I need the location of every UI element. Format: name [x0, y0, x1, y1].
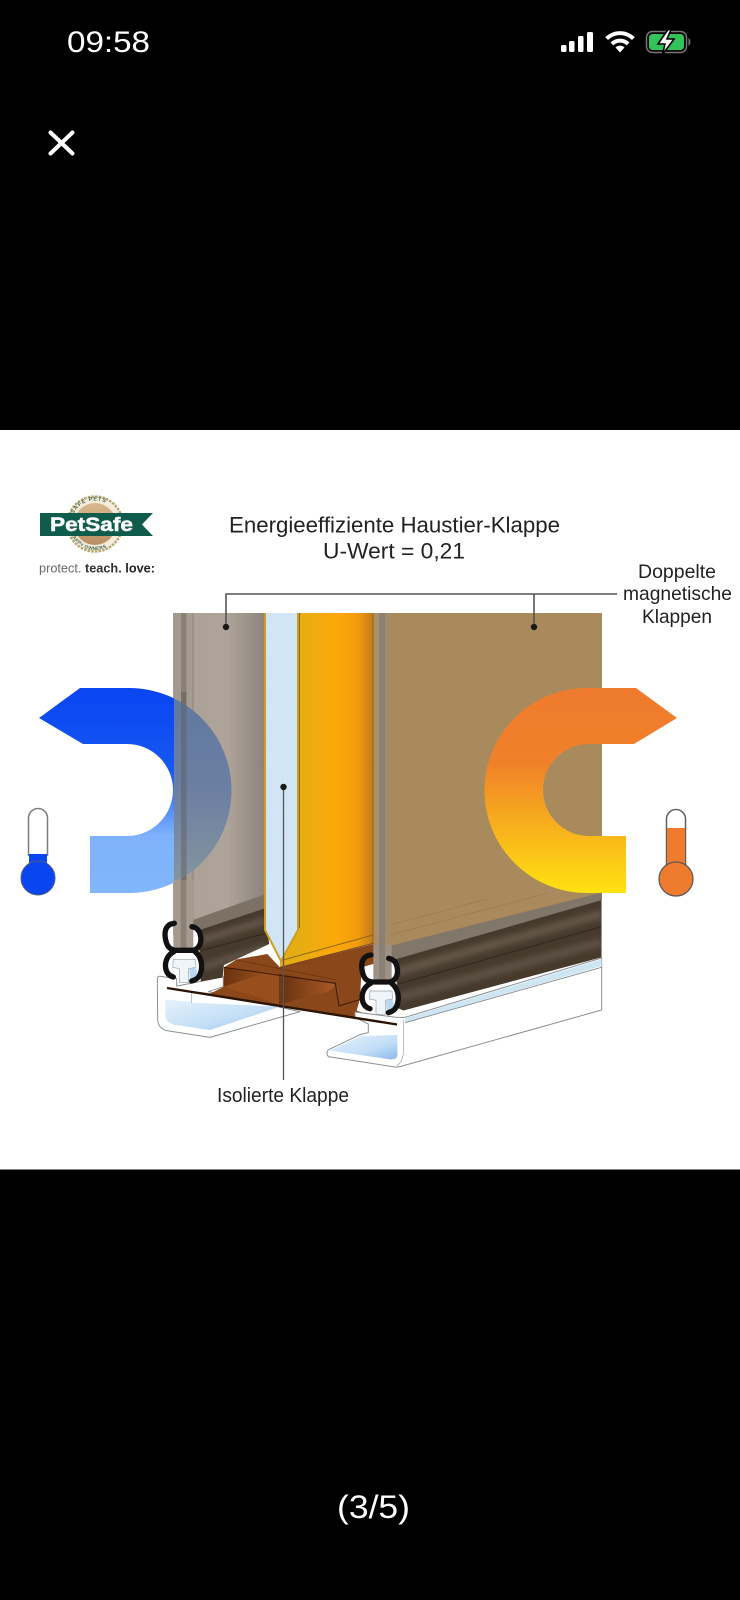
right gasket shadow strip: [373, 893, 602, 959]
label: double magnetic flaps: [623, 561, 732, 628]
logo: green banner: [40, 513, 153, 536]
leader line: double flaps: [223, 594, 617, 630]
dark threshold line: [167, 988, 397, 1024]
label: double magnetic flaps: Doppelte: [638, 561, 716, 583]
icon: cellular signal: [561, 32, 593, 52]
left seal profile: [165, 880, 202, 983]
heading: [229, 512, 560, 564]
right gasket body: [395, 900, 602, 1011]
left lower assembly: [157, 880, 300, 1037]
right flap: frame strips: [373, 613, 391, 953]
right panel bottom lines: [390, 893, 547, 935]
logo: seal badge: HAPPY OWNERS: [72, 536, 106, 550]
label: double magnetic flaps: Klappen: [642, 606, 712, 628]
logo: tagline: protect. teach. love:: [39, 560, 155, 576]
yellow core edge lines: [283, 613, 373, 960]
PetSafe logo: [39, 495, 155, 576]
insulated flap foam core: [265, 613, 300, 961]
blue cold-air arrow: [39, 688, 232, 893]
leader line: insulated flap: [280, 784, 287, 1080]
right seal profile: [362, 912, 398, 1014]
logo: seal badge: SAFE PETS: [70, 496, 106, 513]
panel: white product image: [0, 430, 740, 1170]
icon: charging battery: [646, 30, 690, 54]
brown base channel: [168, 943, 397, 1024]
left flap: glass panel: [173, 613, 264, 935]
left aluminium profile: [157, 976, 300, 1037]
left gasket body: [199, 909, 269, 982]
heading: Energieeffiziente Haustier-Klappe: [229, 512, 560, 538]
diagram: cross-section of the flap: [39, 594, 677, 1080]
right aluminium profile: [327, 958, 602, 1067]
icon: close X: [50, 132, 72, 154]
status bar time: 09:58: [67, 26, 150, 59]
left flap: frame strips: [173, 613, 194, 925]
orange warm-air arrow: [484, 688, 677, 893]
logo: seal badge: [68, 495, 122, 553]
right lower assembly: [327, 893, 602, 1067]
left gasket shadow strip: [183, 895, 264, 930]
heading: U-Wert = 0,21: [323, 538, 465, 564]
logo: wordmark: PetSafe: [50, 514, 133, 536]
icon: wifi: [607, 33, 633, 52]
warm thermometer: [659, 810, 693, 896]
gallery page counter: (3/5): [337, 1489, 410, 1525]
label: double magnetic flaps: magnetische: [623, 583, 732, 605]
label: insulated flap: Isolierte Klappe: [217, 1085, 349, 1107]
yellow core panel: [280, 613, 373, 967]
right flap: tan panel: [373, 613, 602, 960]
cold thermometer: [21, 808, 55, 895]
